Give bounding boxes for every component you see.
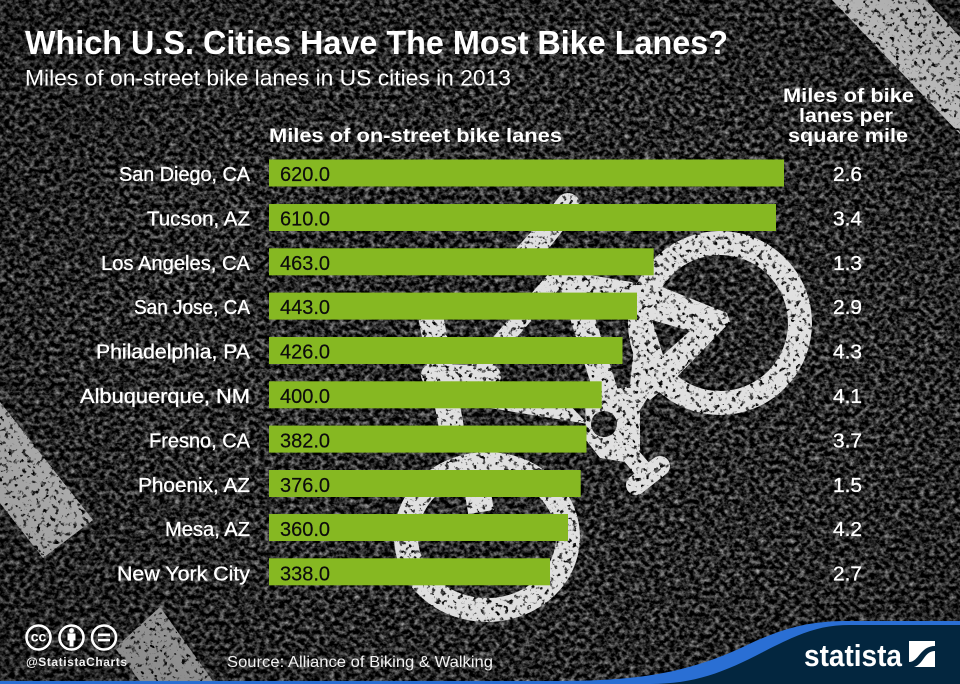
icon: creative commons badges: cc [31, 628, 46, 644]
row: Fresno: Fresno, CA [149, 429, 250, 452]
row: Fresno [149, 426, 862, 453]
credit handle: @StatistaCharts [26, 655, 127, 669]
row: Fresno: 3.7 [833, 429, 862, 452]
row: San Diego: 620.0 [280, 163, 330, 186]
icon: statista logo [909, 641, 935, 667]
statista wordmark: statista [804, 638, 903, 673]
row: Tucson [147, 204, 862, 231]
row: Mesa: Mesa, AZ [165, 518, 250, 541]
source: Source: Alliance of Biking & Walking [227, 654, 493, 671]
row: Fresno: 382.0 [280, 429, 330, 452]
row: Mesa: 360.0 [280, 518, 330, 541]
fork piece in lower wheel [473, 462, 481, 512]
row: Philadelphia: 4.3 [833, 341, 862, 364]
title: Which U.S. Cities Have The Most Bike Lanes? [25, 24, 728, 61]
row: New York City: New York City [117, 563, 251, 586]
rear triangle [630, 283, 730, 400]
column heading: miles per square mile: lanes per [799, 105, 893, 127]
lane stripe bottom [115, 607, 215, 684]
row: Tucson: Tucson, AZ [147, 207, 250, 230]
pedal [628, 452, 645, 472]
row: Albuquerque [80, 381, 862, 408]
icon: bicycle symbol [406, 205, 800, 610]
column heading: miles of bike lanes: Miles of on-street bike lanes [269, 125, 562, 147]
down tube [478, 280, 555, 368]
subtitle: Miles of on-street bike lanes in US cities in 2013 [25, 66, 511, 90]
row: San Jose: 2.9 [833, 296, 862, 319]
row: Mesa: 4.2 [833, 518, 862, 541]
lower wheel [406, 464, 568, 610]
row: Phoenix: Phoenix, AZ [138, 474, 250, 497]
bar chart [80, 160, 862, 586]
crank blob with hole [585, 385, 650, 462]
row: San Jose: 443.0 [280, 296, 330, 319]
row: Albuquerque: 4.1 [833, 385, 862, 408]
upper wheel [640, 243, 800, 403]
column heading: miles per square mile: Miles of bike [783, 85, 914, 107]
row: Mesa [165, 514, 862, 541]
row: Philadelphia: Philadelphia, PA [96, 341, 250, 364]
row: Los Angeles: 1.3 [833, 252, 862, 275]
row: Phoenix: 376.0 [280, 474, 330, 497]
row: Albuquerque: 400.0 [280, 385, 330, 408]
row: New York City [117, 558, 862, 586]
seat tube [572, 285, 606, 392]
seat stem [520, 205, 568, 262]
row: Los Angeles: 463.0 [280, 252, 330, 275]
row: Tucson: 3.4 [833, 207, 862, 230]
row: New York City: 2.7 [833, 563, 862, 586]
row: Phoenix [138, 470, 862, 497]
row: Philadelphia [96, 337, 862, 364]
row: New York City: 338.0 [280, 563, 330, 586]
left fork and handlebar [431, 318, 451, 425]
column heading: miles per square mile [783, 85, 914, 147]
icon: creative commons badges [26, 626, 116, 650]
lane stripe left [0, 402, 93, 558]
row: San Diego: 2.6 [833, 163, 862, 186]
row: San Diego [119, 160, 862, 186]
row: San Diego: San Diego, CA [119, 163, 250, 186]
footer band [0, 621, 960, 684]
row: Tucson: 610.0 [280, 207, 330, 230]
row: Los Angeles [101, 248, 862, 275]
row: San Jose: San Jose, CA [134, 296, 250, 319]
chain stay [490, 395, 588, 424]
row: Philadelphia: 426.0 [280, 341, 330, 364]
lane stripe top right [832, 0, 960, 134]
top tube [556, 278, 640, 292]
row: San Jose [134, 293, 862, 320]
row: Phoenix: 1.5 [833, 474, 862, 497]
row: Albuquerque: Albuquerque, NM [80, 385, 250, 408]
row: Los Angeles: Los Angeles, CA [101, 252, 250, 275]
column heading: miles per square mile: square mile [788, 125, 908, 147]
